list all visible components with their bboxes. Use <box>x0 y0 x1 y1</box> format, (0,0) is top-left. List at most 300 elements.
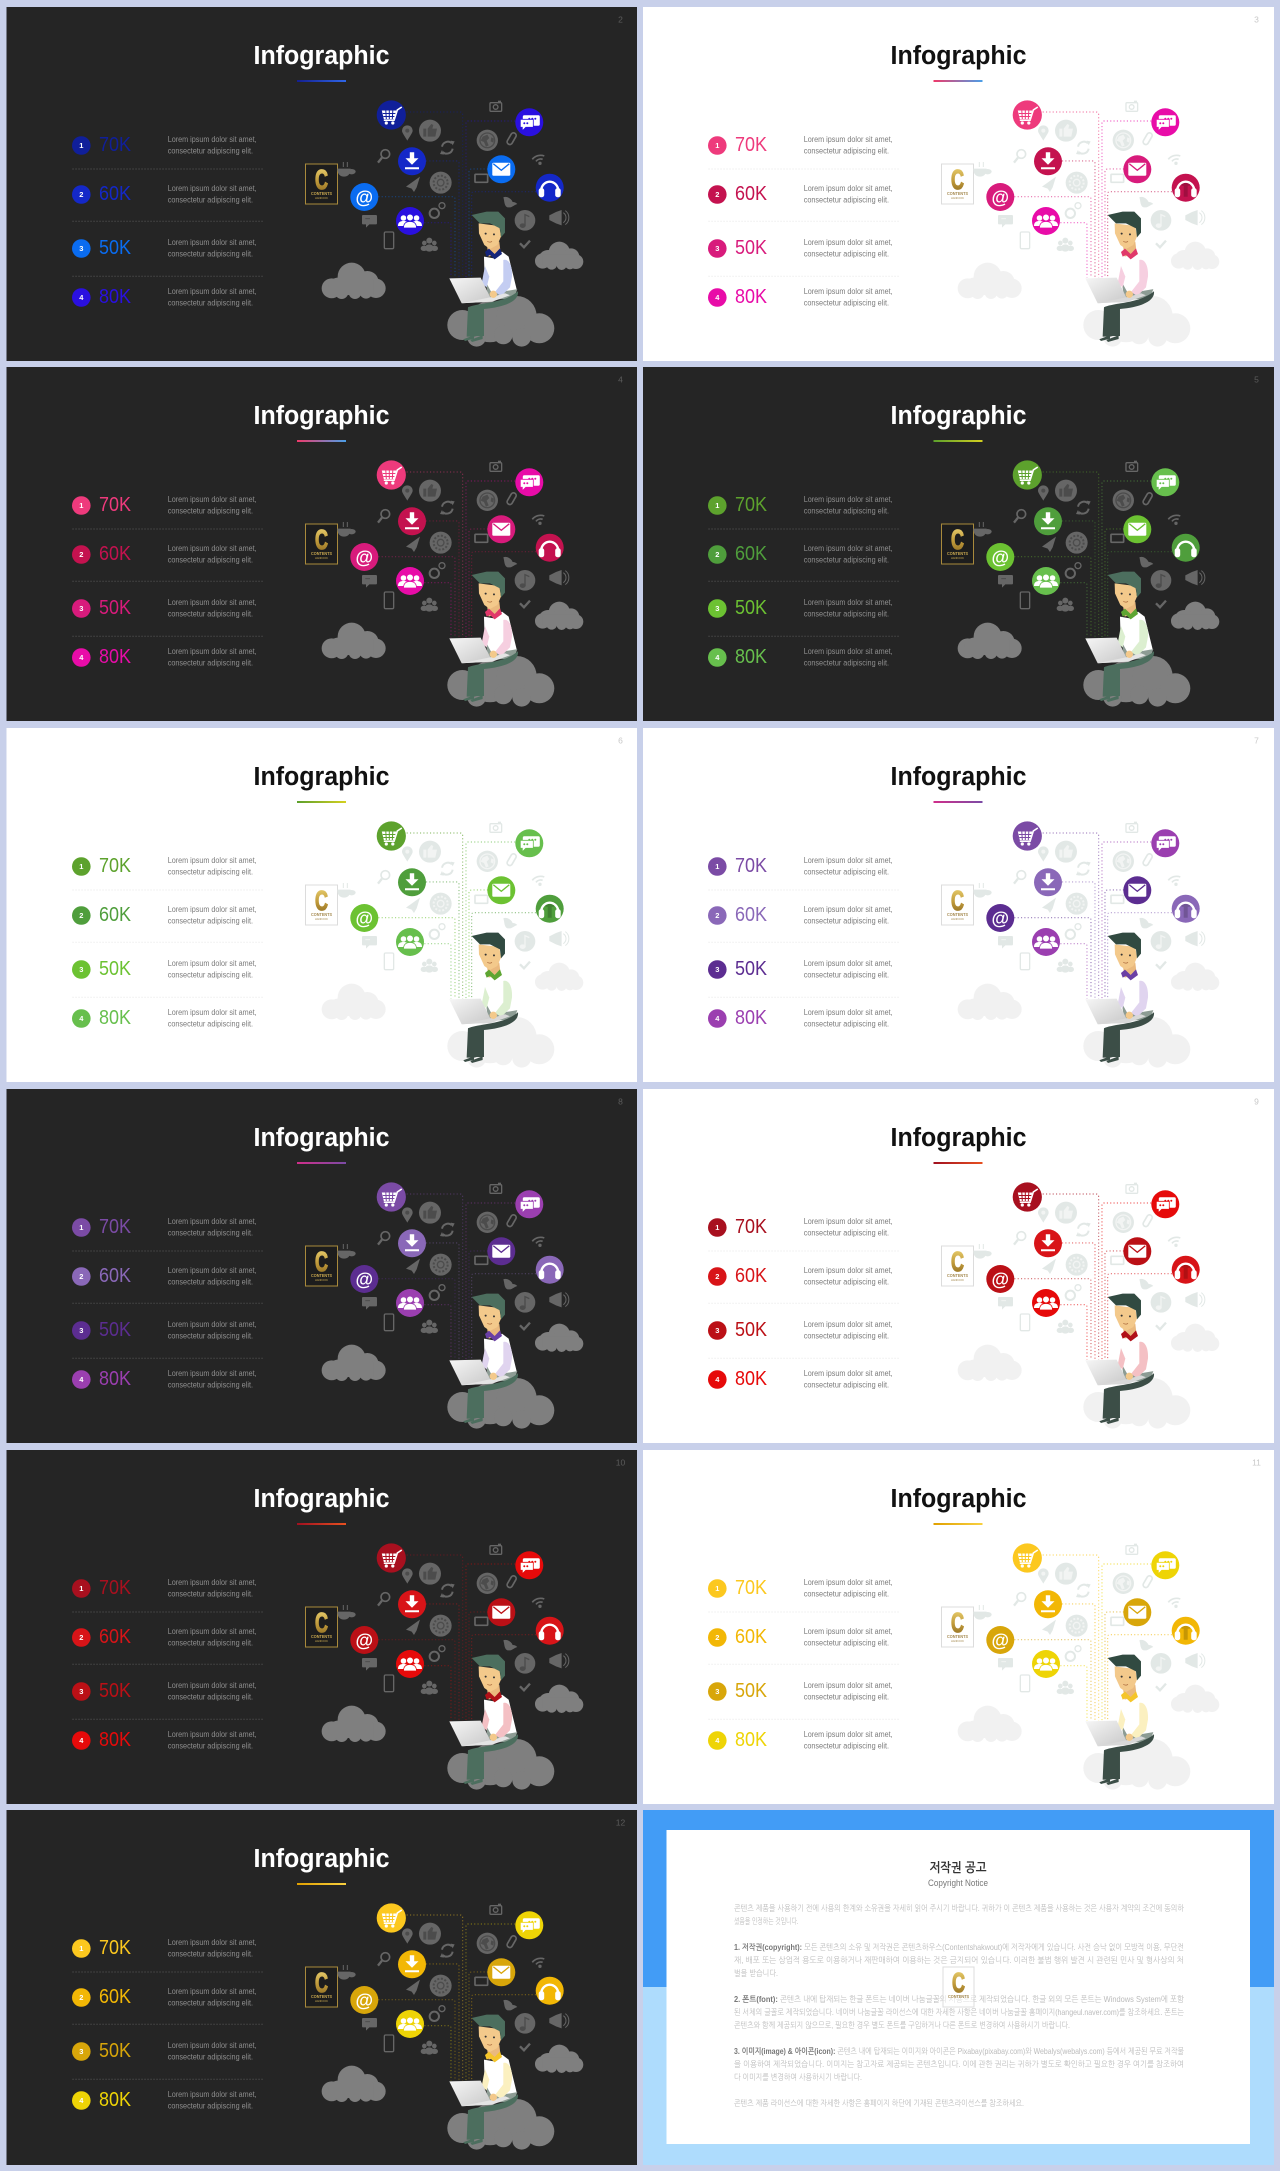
icon: people <box>396 2010 424 2038</box>
icon: headphones <box>536 534 564 562</box>
page number: 10 <box>616 1458 625 1468</box>
grey background icons <box>337 461 569 612</box>
icon: people <box>396 1289 424 1317</box>
stat row 3: 50K <box>99 237 132 259</box>
figure: man with laptop <box>449 212 518 342</box>
stat row 4 <box>708 1007 893 1029</box>
figure: man with laptop <box>1085 572 1154 702</box>
icon: at sign <box>986 904 1014 932</box>
logo: contents <box>306 164 338 204</box>
logo: contents: C <box>315 1607 328 1638</box>
icon: download <box>398 507 426 535</box>
stat row 3 <box>72 1319 257 1341</box>
page number: 7 <box>1254 736 1259 746</box>
stat row 4 <box>708 646 893 668</box>
notice section 2: font <box>734 1994 1184 2030</box>
stat row 4: 80K <box>99 2089 132 2111</box>
stat row 4: consectetur adipiscing elit. <box>804 1741 889 1750</box>
panel: slide 8 dark purple <box>6 1089 637 1443</box>
logo: contents <box>306 524 338 564</box>
icon: at sign <box>350 183 378 211</box>
logo: contents: HANKOOK <box>315 1278 328 1282</box>
stat row 1 <box>72 134 257 156</box>
cloud left <box>322 263 386 299</box>
stat row 4: Lorem ipsum dolor sit amet, <box>168 287 257 296</box>
stat row 1: consectetur adipiscing elit. <box>804 1228 889 1237</box>
title: Infographic <box>890 1485 1026 1513</box>
stat row 1: 1 <box>79 862 83 871</box>
stat row 3: 3 <box>79 2047 83 2056</box>
stat row 2: consectetur adipiscing elit. <box>168 195 253 204</box>
stat row 3: consectetur adipiscing elit. <box>168 2052 253 2061</box>
logo: contents: CONTENTS <box>311 1273 332 1278</box>
panel: slide 7 white purple <box>643 728 1274 1082</box>
stat row 1: consectetur adipiscing elit. <box>804 506 889 515</box>
stat row 3: 3 <box>715 965 719 974</box>
icon: chat <box>1151 1190 1179 1218</box>
stat row 1: consectetur adipiscing elit. <box>804 146 889 155</box>
stat row 1: Lorem ipsum dolor sit amet, <box>804 495 893 504</box>
page number: 4 <box>618 374 623 384</box>
stat row 2: consectetur adipiscing elit. <box>804 916 889 925</box>
stat row 1: 1 <box>79 1584 83 1593</box>
stat row 2 <box>72 904 257 926</box>
stat row 3: 3 <box>715 244 719 253</box>
stat row 3: 50K <box>99 1319 132 1341</box>
panel: slide 12 dark yellow <box>6 1810 637 2165</box>
notice section 3: images and icons: 3. 이미지(image) & 아이콘(icon): 콘텐츠 내에 탑재되는 이미지와 아이콘은 Pixabay(pixabay.com)와 Webalys(webalys.com) 등에서 제공된 무료 저작물 <box>734 2046 1184 2056</box>
stat row 2: 60K <box>99 1626 132 1648</box>
icon: headphones <box>536 1256 564 1284</box>
notice footer text: 콘텐츠 제품 라이선스에 대한 자세한 사항은 홈페이지 하단에 기재된 콘텐츠라이선스를 참조하세요. <box>734 2098 1024 2108</box>
stat row 2: 60K <box>99 1265 132 1287</box>
logo: contents: HANKOOK <box>951 556 964 560</box>
stat row 1: Lorem ipsum dolor sit amet, <box>168 856 257 865</box>
icon: download <box>1034 507 1062 535</box>
stat row 2 <box>708 904 893 926</box>
icon: headphones <box>1172 174 1200 202</box>
notice section 3: images and icons: 다 이미지를 변경하여 사용하시기 바랍니다. <box>734 2072 862 2082</box>
title: Infographic <box>890 402 1026 430</box>
stat row 3: Lorem ipsum dolor sit amet, <box>168 959 257 968</box>
icon: download <box>398 1229 426 1257</box>
stat row 2 <box>72 1265 257 1287</box>
panel: slide 4 dark pink <box>6 367 637 721</box>
icon: at sign <box>350 1265 378 1293</box>
icon: chat <box>1151 1551 1179 1579</box>
logo overlay: contents: C <box>952 1967 965 1998</box>
grey background icons <box>973 822 1205 973</box>
stat row 4 <box>72 646 257 668</box>
stat row 3: 3 <box>79 965 83 974</box>
logo: contents: HANKOOK <box>951 917 964 921</box>
connector dotted lines <box>1014 1555 1172 1720</box>
cloud under figure <box>1083 296 1190 347</box>
grey background icons <box>973 1183 1205 1334</box>
stat row 3: Lorem ipsum dolor sit amet, <box>168 238 257 247</box>
stat row 3: consectetur adipiscing elit. <box>168 1692 253 1701</box>
stat row 4: Lorem ipsum dolor sit amet, <box>804 647 893 656</box>
stat row 1: Lorem ipsum dolor sit amet, <box>168 1217 257 1226</box>
icon: cart <box>377 460 406 490</box>
cloud right <box>1171 602 1219 630</box>
cloud left <box>322 984 386 1020</box>
stat row 2: 2 <box>79 911 83 920</box>
stat row 3 <box>72 958 257 980</box>
stat row 2 <box>72 1626 257 1648</box>
stat row 2: Lorem ipsum dolor sit amet, <box>168 905 257 914</box>
stat row 4: 4 <box>715 1014 720 1023</box>
notice section 3: images and icons: 을 이용하여 제작되었습니다. 이미지는 참고자료 제공되는 콘텐츠입니다. 이에 관한 권리는 귀하가 별도로 확인하고 필요한 경우 여기를 참조하여 <box>734 2059 1184 2069</box>
stat row 2: 60K <box>99 183 132 205</box>
stat row 1: 70K <box>99 1216 132 1238</box>
icon: at sign: @ <box>992 1630 1009 1650</box>
cloud right <box>535 1324 583 1352</box>
stat row 1 <box>72 1577 257 1599</box>
logo: contents <box>306 1607 338 1647</box>
logo: contents: C <box>951 164 964 195</box>
stat row 4 <box>72 1007 257 1029</box>
icon: download <box>1034 147 1062 175</box>
stat row 4: 80K <box>735 1007 768 1029</box>
cloud right <box>1171 1685 1219 1713</box>
title underline <box>934 801 982 803</box>
icon: chat <box>1151 108 1179 136</box>
icon: download <box>1034 868 1062 896</box>
stat row 4: 4 <box>715 1375 720 1384</box>
stat row 2: Lorem ipsum dolor sit amet, <box>168 544 257 553</box>
logo: contents <box>942 885 974 925</box>
stat row 1: Lorem ipsum dolor sit amet, <box>804 856 893 865</box>
icon: mail <box>487 1598 515 1626</box>
stat row 2 <box>72 1986 257 2008</box>
figure: man with laptop <box>449 1655 518 1785</box>
icon: cart <box>1013 1543 1042 1573</box>
stat row 3: Lorem ipsum dolor sit amet, <box>804 1320 893 1329</box>
icon: cart <box>377 100 406 130</box>
logo: contents: HANKOOK <box>951 1639 964 1643</box>
logo: contents: CONTENTS <box>311 912 332 917</box>
logo: contents: CONTENTS <box>311 1634 332 1639</box>
logo: contents: CONTENTS <box>947 912 968 917</box>
cloud right <box>535 602 583 630</box>
icon: mail <box>1123 1237 1151 1265</box>
stat row 1: 1 <box>79 1944 83 1953</box>
connector dotted lines <box>1014 112 1172 277</box>
stat row 1: consectetur adipiscing elit. <box>168 1949 253 1958</box>
figure: man with laptop <box>449 2015 518 2145</box>
stat row 2: 2 <box>79 1272 83 1281</box>
logo: contents <box>942 1607 974 1647</box>
stat row 3 <box>72 237 257 259</box>
stat row 2: consectetur adipiscing elit. <box>168 1638 253 1647</box>
icon: at sign: @ <box>356 908 373 928</box>
stat row 4: 80K <box>99 286 132 308</box>
stat row 1: consectetur adipiscing elit. <box>168 1589 253 1598</box>
stat row 4: 80K <box>99 1007 132 1029</box>
stat row 4: consectetur adipiscing elit. <box>168 1019 253 1028</box>
stat row 1: consectetur adipiscing elit. <box>804 867 889 876</box>
stat row 4: 80K <box>735 286 768 308</box>
stat row 3: 3 <box>715 604 719 613</box>
stat row 2: Lorem ipsum dolor sit amet, <box>804 1266 893 1275</box>
icon: chat <box>515 1911 543 1939</box>
icon: at sign <box>986 543 1014 571</box>
notice section 2: font: 콘텐츠와 함께 제공되지 않으므로, 필요한 경우 별도 폰트를 구입하거나 다른 폰트로 변경하여 사용하시기 바랍니다. <box>734 2020 1070 2030</box>
stat row 3 <box>72 1680 257 1702</box>
stat row 1: Lorem ipsum dolor sit amet, <box>168 1578 257 1587</box>
cloud under figure <box>1083 1378 1190 1429</box>
panel: slide 5 dark green <box>643 367 1274 721</box>
logo: contents: CONTENTS <box>947 551 968 556</box>
stat row 3: 3 <box>79 244 83 253</box>
stat row 3: Lorem ipsum dolor sit amet, <box>804 959 893 968</box>
stat row 3: consectetur adipiscing elit. <box>804 970 889 979</box>
icon: mail <box>1123 1598 1151 1626</box>
cloud left <box>958 1345 1022 1381</box>
stat row 4: consectetur adipiscing elit. <box>168 658 253 667</box>
grey background icons <box>337 1904 569 2055</box>
logo: contents: C <box>951 885 964 916</box>
notice intro text <box>734 1903 1184 1926</box>
stat row 1: 1 <box>79 1223 83 1232</box>
figure: man with laptop <box>1085 1655 1154 1785</box>
logo overlay: contents: CONTENTS <box>948 1994 969 1999</box>
stat row 3: 50K <box>735 1319 768 1341</box>
stat row 4: 4 <box>79 1375 84 1384</box>
panel: copyright notice <box>643 1810 1274 2165</box>
connector dotted lines <box>378 112 536 277</box>
title underline <box>934 80 982 82</box>
stat row 4 <box>72 2089 257 2111</box>
stat row 3: consectetur adipiscing elit. <box>804 609 889 618</box>
icon: headphones <box>536 895 564 923</box>
icon: at sign <box>350 904 378 932</box>
logo: contents <box>942 524 974 564</box>
cloud right <box>535 2045 583 2073</box>
stat row 2: Lorem ipsum dolor sit amet, <box>804 184 893 193</box>
icon: mail <box>1123 876 1151 904</box>
stat row 3: 3 <box>715 1687 719 1696</box>
stat row 3: Lorem ipsum dolor sit amet, <box>168 2041 257 2050</box>
notice section 2: font: 된 서체의 글꼴로 제작되었습니다. 네이버 나눔글꼴 라이선스에 대한 자세한 사항은 네이버 나눔글꼴 홈페이지(hangeul.naver.com)를 참조하세요. 폰트는 <box>734 2007 1184 2017</box>
page number: 12 <box>616 1818 625 1828</box>
icon: download <box>1034 1590 1062 1618</box>
stat row 3: consectetur adipiscing elit. <box>804 1331 889 1340</box>
icon: cart <box>1013 1182 1042 1212</box>
logo: contents: C <box>315 1246 328 1277</box>
icon: people <box>396 207 424 235</box>
stat row 2: consectetur adipiscing elit. <box>804 555 889 564</box>
stat row 2: 2 <box>79 1633 83 1642</box>
logo: contents: C <box>951 1607 964 1638</box>
grey background icons <box>973 101 1205 252</box>
stat row 4: 4 <box>715 1736 720 1745</box>
stat row 4: consectetur adipiscing elit. <box>804 658 889 667</box>
icon: at sign: @ <box>356 1270 373 1290</box>
stat row 1: Lorem ipsum dolor sit amet, <box>168 1938 257 1947</box>
stat row 3 <box>708 597 893 619</box>
icon: headphones <box>1172 1256 1200 1284</box>
stat row 3 <box>708 1680 893 1702</box>
icon: chat <box>515 1551 543 1579</box>
stat row 1: 70K <box>735 1577 768 1599</box>
icon: at sign: @ <box>356 1990 373 2010</box>
icon: people <box>1032 567 1060 595</box>
logo: contents: HANKOOK <box>315 196 328 200</box>
stat row 1: 1 <box>715 141 719 150</box>
icon: at sign: @ <box>356 1630 373 1650</box>
title: Infographic <box>254 1845 390 1873</box>
notice heading: 저작권 공고 <box>930 1860 986 1875</box>
icon: at sign <box>350 543 378 571</box>
logo: contents: HANKOOK <box>951 1278 964 1282</box>
stat row 2 <box>708 1265 893 1287</box>
logo: contents <box>306 885 338 925</box>
panel: slide 9 white red <box>643 1089 1274 1443</box>
stat row 2: Lorem ipsum dolor sit amet, <box>804 905 893 914</box>
stat row 2: 60K <box>735 543 768 565</box>
stat row 1: 1 <box>715 1584 719 1593</box>
panel: slide 11 white yellow <box>643 1450 1274 1804</box>
notice section 2: font: 2. 폰트(font): 콘텐츠 내에 탑재되는 한글 폰트는 네이버 나눔글꼴의 사용으로 제작되었습니다. 한글 외의 모든 폰트는 Windows System에 포함 <box>734 1994 1184 2004</box>
stat row 1: 70K <box>99 1937 132 1959</box>
stat row 3: 50K <box>735 1680 768 1702</box>
stat row 1: 1 <box>715 1223 719 1232</box>
grey background icons <box>973 1544 1205 1695</box>
title underline <box>297 440 346 442</box>
icon: people <box>1032 1289 1060 1317</box>
icon: at sign: @ <box>992 188 1009 208</box>
cloud under figure <box>447 1017 554 1068</box>
page number: 9 <box>1254 1096 1259 1106</box>
stat row 3: Lorem ipsum dolor sit amet, <box>804 1681 893 1690</box>
notice intro text: 셨음을 인정하는 것입니다. <box>734 1916 798 1926</box>
stat row 3: Lorem ipsum dolor sit amet, <box>168 1681 257 1690</box>
title: Infographic <box>254 763 390 791</box>
icon: chat <box>515 108 543 136</box>
cloud left <box>958 623 1022 659</box>
logo: contents: CONTENTS <box>311 191 332 196</box>
icon: mail <box>1123 155 1151 183</box>
logo overlay: contents <box>943 1967 974 2007</box>
stat row 2: 2 <box>79 550 83 559</box>
stat row 1 <box>708 134 893 156</box>
stat row 2: consectetur adipiscing elit. <box>168 1277 253 1286</box>
stat row 1: 70K <box>99 1577 132 1599</box>
stat row 4 <box>72 1368 257 1390</box>
stat row 4: Lorem ipsum dolor sit amet, <box>168 1730 257 1739</box>
icon: headphones <box>1172 534 1200 562</box>
stat row 2: 2 <box>715 190 719 199</box>
notice section 1: copyright: 벌을 받습니다. <box>734 1968 778 1978</box>
notice section 1: copyright: 1. 저작권(copyright): 모든 콘텐츠의 소유 및 저작권은 콘텐츠하우스(Contentshakwout)에 저작자에게 있습니다. 사전 승낙 없이 모방적 이용, 무단전 <box>734 1942 1184 1952</box>
cloud left <box>322 1706 386 1742</box>
logo: contents: CONTENTS <box>311 1994 332 1999</box>
stat row 2: Lorem ipsum dolor sit amet, <box>804 544 893 553</box>
icon: mail <box>487 876 515 904</box>
connector dotted lines <box>1014 1194 1172 1359</box>
icon: at sign: @ <box>992 548 1009 568</box>
icon: at sign <box>350 1986 378 2014</box>
panel: slide 6 white green <box>6 728 637 1082</box>
stat row 1: 70K <box>735 494 768 516</box>
stat row 2: Lorem ipsum dolor sit amet, <box>168 1266 257 1275</box>
icon: people <box>396 928 424 956</box>
cloud left <box>322 2066 386 2102</box>
stat row 3: 50K <box>735 237 768 259</box>
stat row 4: 4 <box>715 293 720 302</box>
stat row 1: Lorem ipsum dolor sit amet, <box>168 135 257 144</box>
icon: headphones <box>536 174 564 202</box>
icon: headphones <box>536 1977 564 2005</box>
title underline <box>934 1162 982 1164</box>
logo: contents: C <box>315 885 328 916</box>
stat row 2: Lorem ipsum dolor sit amet, <box>168 1627 257 1636</box>
connector dotted lines <box>1014 833 1172 998</box>
icon: people <box>1032 1650 1060 1678</box>
icon: download <box>398 1590 426 1618</box>
grey background icons <box>337 1544 569 1695</box>
logo: contents: C <box>315 524 328 555</box>
stat row 2: 2 <box>79 190 83 199</box>
icon: headphones <box>1172 895 1200 923</box>
figure: man with laptop <box>449 1294 518 1424</box>
cloud left <box>958 263 1022 299</box>
logo: contents: CONTENTS <box>947 1273 968 1278</box>
stat row 3: 3 <box>79 1326 83 1335</box>
cloud under figure <box>447 296 554 347</box>
page number: 11 <box>1252 1458 1261 1468</box>
stat row 4: 4 <box>79 2096 84 2105</box>
icon: download <box>1034 1229 1062 1257</box>
stat row 1 <box>72 1216 257 1238</box>
stat row 1: 70K <box>99 855 132 877</box>
notice intro text: 콘텐츠 제품을 사용하기 전에 사용의 한계와 소유권을 자세히 읽어 주시기 바랍니다. 귀하가 이 콘텐츠 제품을 사용하는 것은 사용자 계약의 조건에 동의하 <box>734 1903 1184 1913</box>
logo: contents <box>306 1246 338 1286</box>
icon: mail <box>487 1237 515 1265</box>
stat row 1 <box>708 494 893 516</box>
stat row 3: consectetur adipiscing elit. <box>168 970 253 979</box>
stat row 4 <box>72 286 257 308</box>
icon: at sign: @ <box>356 548 373 568</box>
stat row 3: consectetur adipiscing elit. <box>804 249 889 258</box>
connector dotted lines <box>378 1915 536 2080</box>
stat row 4: consectetur adipiscing elit. <box>168 1741 253 1750</box>
icon: cart <box>377 1903 406 1933</box>
stat row 1: 70K <box>735 134 768 156</box>
stat row 2 <box>72 543 257 565</box>
notice section 3: images and icons <box>734 2046 1184 2082</box>
title: Infographic <box>890 763 1026 791</box>
cloud under figure <box>1083 1017 1190 1068</box>
logo: contents <box>942 1246 974 1286</box>
logo: contents <box>942 164 974 204</box>
title: Infographic <box>254 402 390 430</box>
page number: 3 <box>1254 14 1259 24</box>
stat row 2: 2 <box>79 1993 83 2002</box>
icon: cart <box>377 1543 406 1573</box>
icon: people <box>1032 928 1060 956</box>
stat row 1 <box>708 1577 893 1599</box>
logo: contents: HANKOOK <box>315 917 328 921</box>
cloud left <box>322 1345 386 1381</box>
title underline <box>297 80 346 82</box>
stat row 2: consectetur adipiscing elit. <box>168 916 253 925</box>
connector dotted lines <box>1014 472 1172 637</box>
stat row 1 <box>708 1216 893 1238</box>
stat row 3 <box>72 2040 257 2062</box>
